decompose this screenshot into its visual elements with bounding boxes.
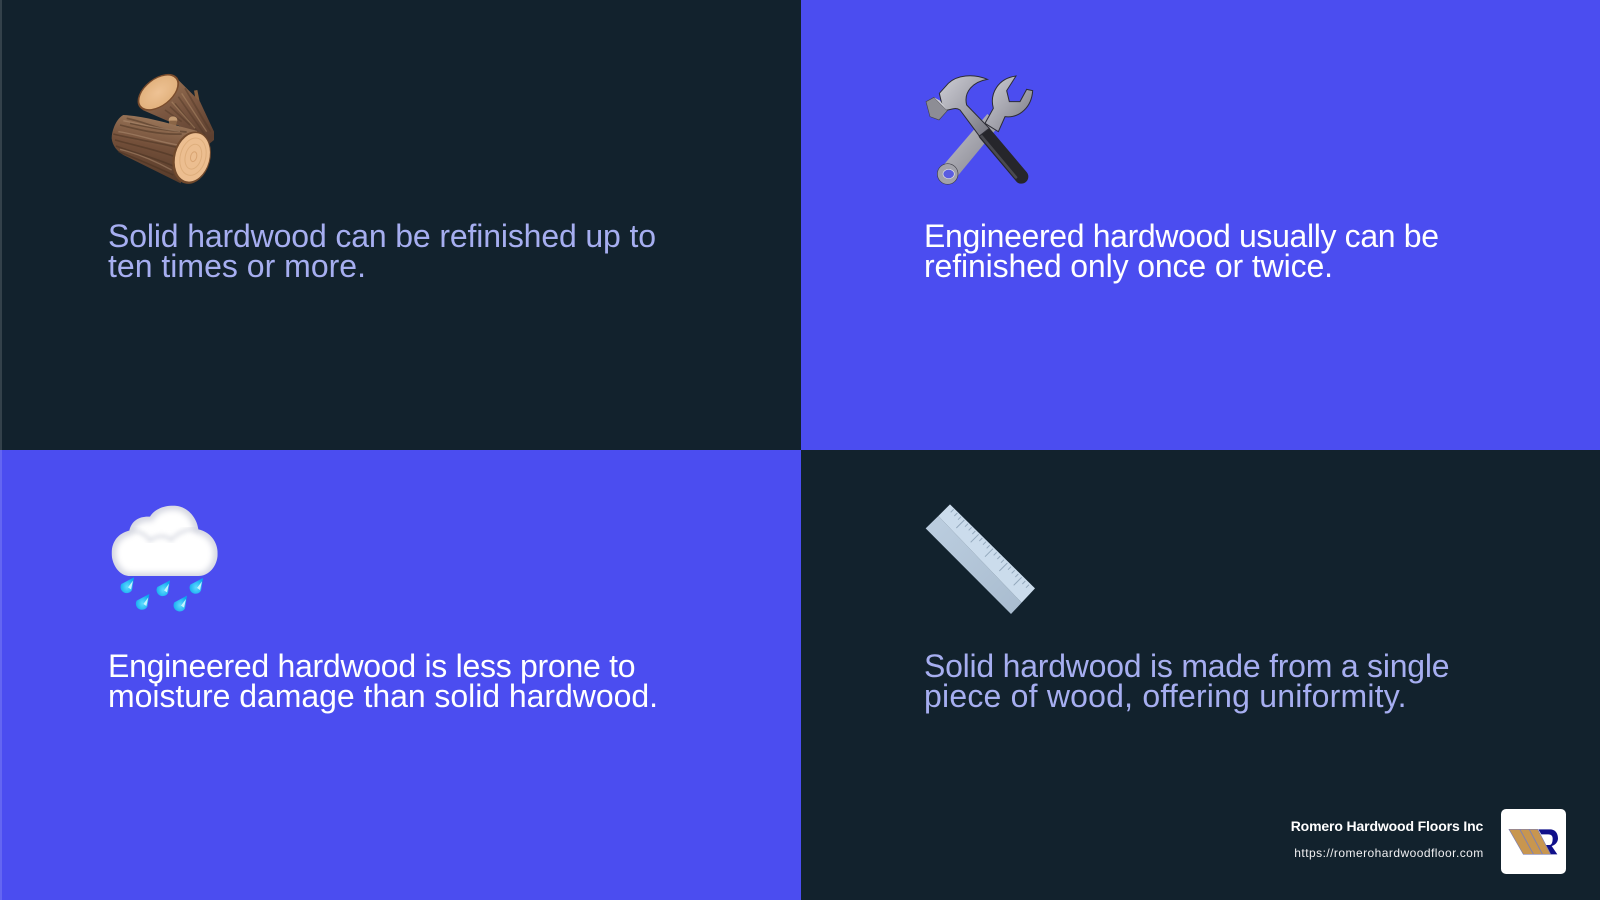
text: uniformity: piece of wood, offering uniformity. [924, 678, 1406, 714]
panel: uniformity [801, 450, 1600, 900]
text: engineered hardwood refinishing [924, 218, 1439, 284]
text: engineered hardwood refinishing: Engineered hardwood usually can be [924, 218, 1439, 254]
company name and url: https://romerohardwoodfloor.com [1294, 846, 1483, 860]
left edge strip [0, 0, 2, 900]
company name and url: Romero Hardwood Floors Inc [1291, 818, 1484, 834]
icon: hammer and wrench [926, 75, 1034, 185]
icon: ruler [926, 504, 1035, 614]
text: moisture damage: Engineered hardwood is less prone to [108, 648, 636, 684]
footer: company branding [1291, 809, 1566, 874]
panel: moisture damage [0, 450, 801, 900]
text: uniformity [924, 648, 1450, 714]
icon: wood logs [112, 74, 214, 184]
panel: solid hardwood refinishing [0, 0, 801, 450]
text: solid hardwood refinishing [108, 218, 656, 284]
logo [1501, 809, 1566, 874]
text: moisture damage [108, 648, 658, 714]
company name and url [1291, 818, 1484, 860]
text: solid hardwood refinishing: Solid hardwood can be refinished up to [108, 218, 656, 254]
text: solid hardwood refinishing: ten times or more. [108, 248, 366, 284]
panel: engineered hardwood refinishing [801, 0, 1600, 450]
text: engineered hardwood refinishing: refinished only once or twice. [924, 248, 1333, 284]
icon: rain cloud [112, 506, 218, 612]
text: uniformity: Solid hardwood is made from a single [924, 648, 1450, 684]
text: moisture damage: moisture damage than solid hardwood. [108, 678, 658, 714]
